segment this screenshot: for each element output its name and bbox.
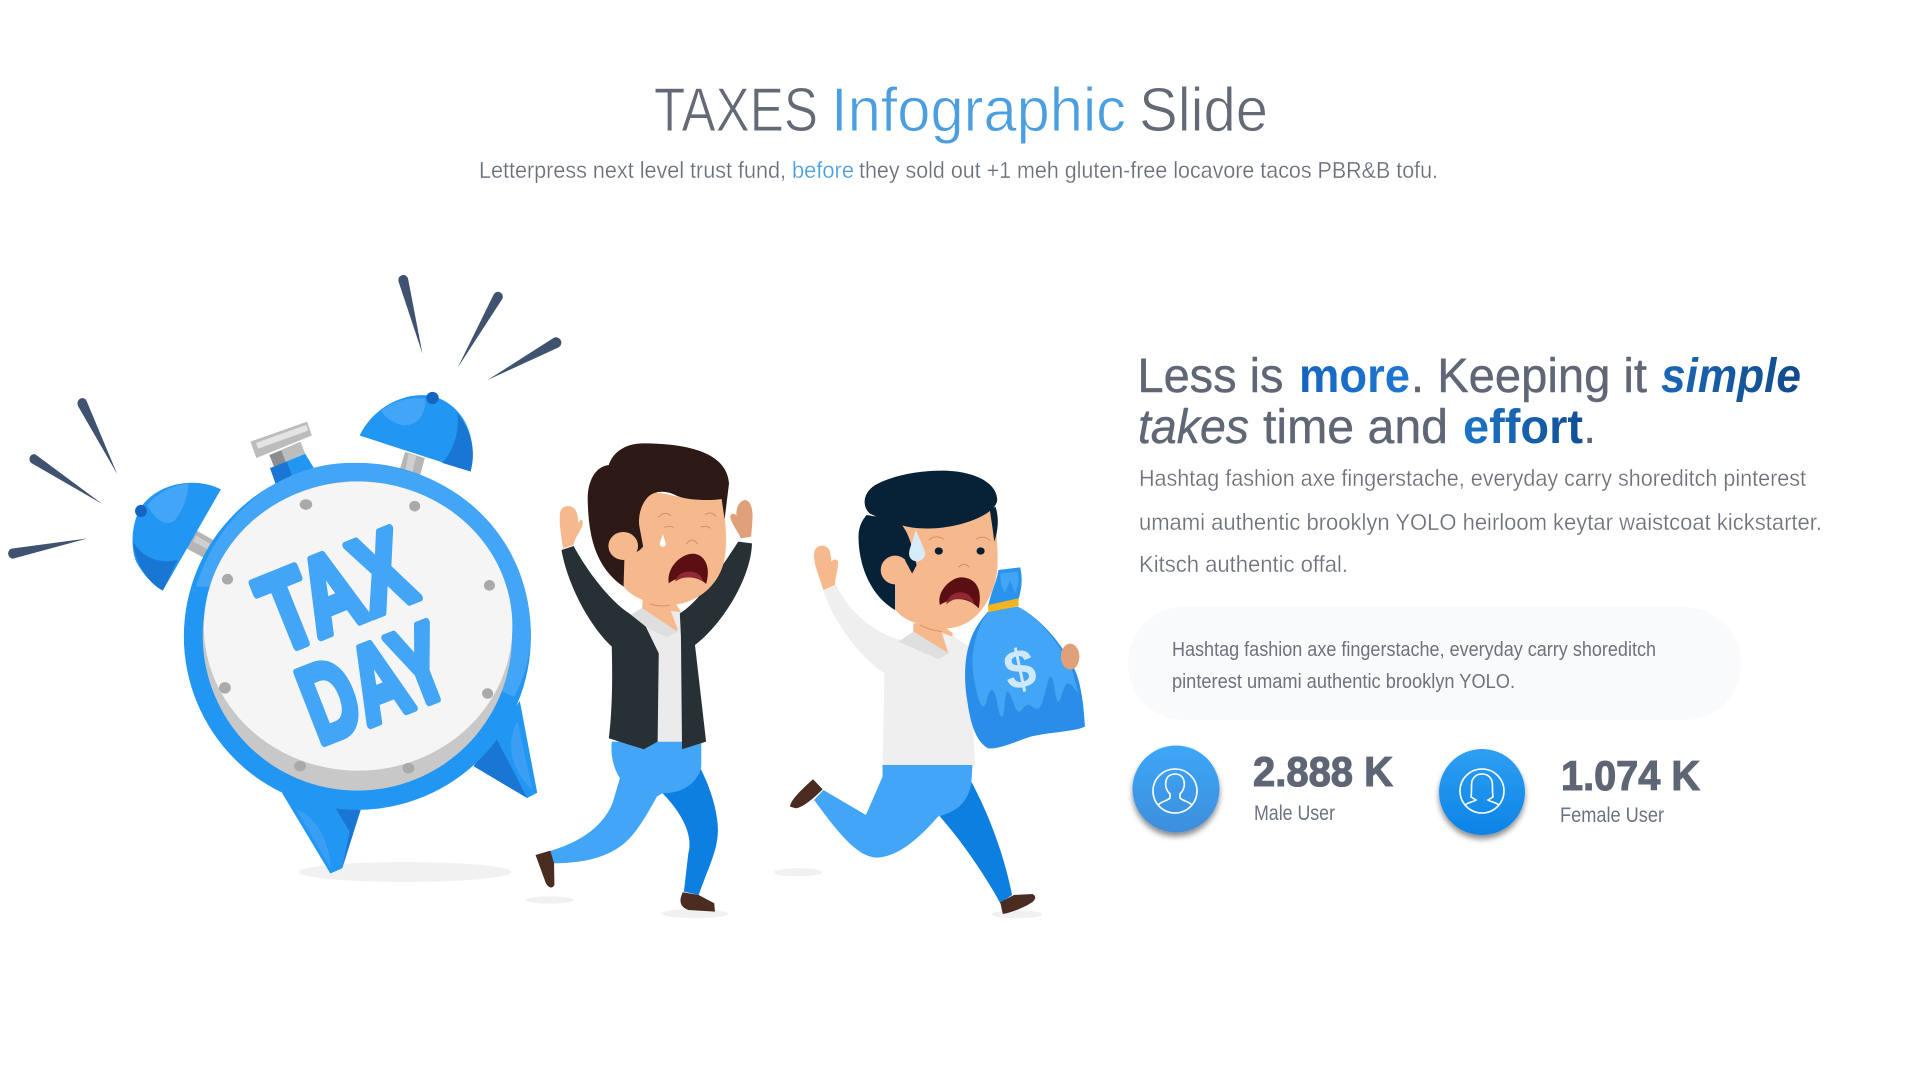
clock text: DAY: DAY	[283, 599, 464, 767]
title	[654, 76, 1268, 145]
raised hand	[814, 546, 838, 590]
head	[859, 471, 998, 632]
clock shadow	[299, 862, 511, 882]
heading: .	[1583, 401, 1596, 454]
stat: female user	[1439, 749, 1700, 835]
callout pill: pinterest umami authentic brooklyn YOLO.	[1172, 671, 1515, 693]
subtitle: Letterpress next level trust fund,	[479, 157, 786, 183]
right bell	[360, 392, 473, 476]
illustration: running man with money bag	[774, 471, 1085, 918]
title: TAXES	[654, 76, 818, 145]
subtitle	[479, 157, 1438, 183]
heading: . Keeping it	[1411, 350, 1647, 403]
shirt	[823, 585, 975, 765]
title: Slide	[1139, 76, 1268, 145]
heading: Less is	[1138, 350, 1284, 403]
subtitle: before	[792, 157, 854, 183]
heading: time and	[1263, 401, 1448, 454]
illustration: crying man	[526, 443, 753, 918]
money bag dollar sign: $	[998, 636, 1041, 703]
title: Infographic	[831, 76, 1126, 145]
icon: female user	[1439, 749, 1525, 835]
callout pill: Hashtag fashion axe fingerstache, everyday carry shoreditch	[1172, 639, 1656, 661]
money bag	[965, 567, 1085, 749]
face screws	[219, 499, 495, 774]
head	[588, 443, 729, 606]
subtitle: they sold out +1 meh gluten-free locavore tacos PBR&B tofu.	[859, 157, 1438, 183]
winding button	[250, 422, 314, 484]
hands	[560, 500, 753, 548]
left bell	[133, 483, 221, 591]
illustration: alarm clock	[8, 275, 561, 882]
ground shadows	[774, 868, 1042, 918]
clock body and face	[133, 392, 537, 874]
legs	[536, 742, 718, 912]
clock sound sparks	[8, 275, 561, 559]
heading: effort	[1463, 401, 1583, 454]
body paragraph	[1139, 465, 1822, 577]
ground shadows	[526, 896, 728, 918]
stat: male user	[1132, 746, 1393, 832]
stat: male user: Male User	[1254, 802, 1335, 825]
body paragraph: umami authentic brooklyn YOLO heirloom keytar waistcoat kickstarter.	[1139, 509, 1822, 535]
stat: female user: 1.074 K	[1561, 752, 1700, 799]
body paragraph: Kitsch authentic offal.	[1139, 551, 1348, 577]
icon: male user	[1132, 746, 1220, 832]
heading	[1138, 350, 1801, 454]
legs	[790, 765, 1035, 914]
shirt and neck	[625, 597, 683, 742]
stat: male user: 2.888 K	[1253, 748, 1393, 795]
body paragraph: Hashtag fashion axe fingerstache, everyday carry shoreditch pinterest	[1139, 465, 1807, 491]
heading: takes	[1138, 401, 1249, 454]
clock feet	[282, 701, 537, 874]
callout pill	[1128, 607, 1741, 720]
stat: female user: Female User	[1560, 804, 1664, 827]
heading: simple	[1661, 350, 1801, 403]
heading: more	[1299, 350, 1410, 403]
jacket	[561, 542, 752, 749]
clock text: TAX: TAX	[242, 506, 430, 676]
